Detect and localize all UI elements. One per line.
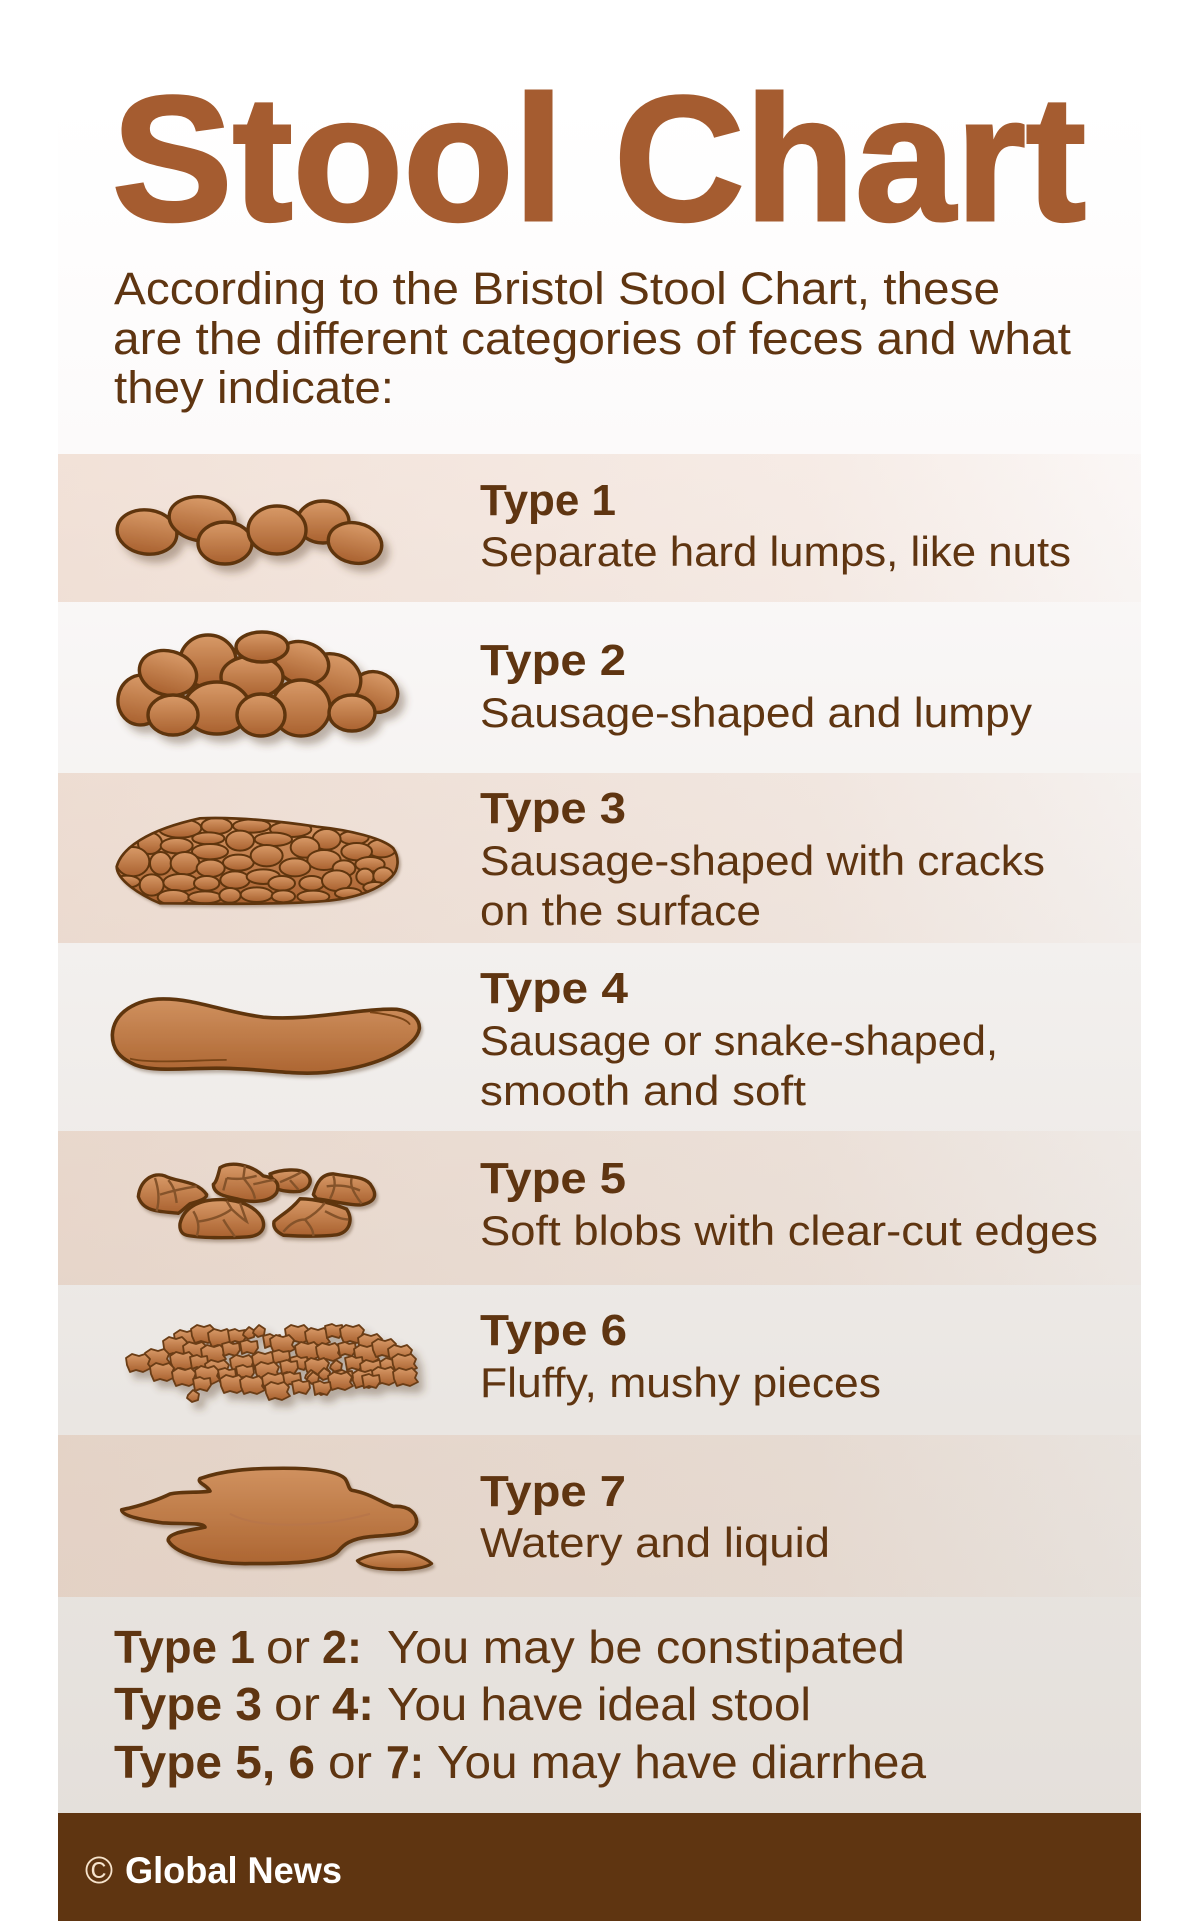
footer credit: Global News	[125, 1850, 342, 1891]
row band type 5	[58, 1131, 1141, 1285]
summary: type 5, 6 or 7: or	[328, 1736, 372, 1788]
text: type 6: Fluffy, mushy pieces	[480, 1359, 881, 1406]
icon: type 3 cracked sausage	[113, 818, 398, 905]
row band type 3	[58, 773, 1141, 943]
text: type 7	[480, 1467, 830, 1566]
text: type 4: Sausage or snake-shaped,	[480, 1017, 998, 1064]
summary: type 1 or 2: or	[266, 1621, 310, 1673]
text: type 4: smooth and soft	[480, 1067, 806, 1114]
icon: type 5 soft blobs	[138, 1164, 375, 1238]
text: type 7: Watery and liquid	[480, 1519, 830, 1566]
text: type 2: Sausage-shaped and lumpy	[480, 689, 1032, 736]
icon: type 6 mushy pieces	[126, 1324, 418, 1402]
text: type 3: on the surface	[480, 887, 761, 934]
text: type 5: Soft blobs with clear-cut edges	[480, 1207, 1098, 1254]
text: type 5	[480, 1154, 1098, 1254]
text: type 1	[480, 476, 1071, 575]
summary: type 5, 6 or 7: Type 5, 6	[114, 1736, 315, 1788]
summary: type 3 or 4: Type 3	[114, 1678, 262, 1730]
summary: type 1 or 2	[114, 1621, 905, 1673]
text: type 3: Sausage-shaped with cracks	[480, 837, 1045, 884]
title: Stool Chart	[112, 59, 1086, 258]
icon: type 4 smooth sausage	[112, 999, 419, 1073]
icon: type 7 liquid puddle	[122, 1468, 432, 1570]
text: type 3	[480, 784, 1045, 934]
summary: type 5, 6 or 7: 7:	[386, 1736, 424, 1788]
row band type 7	[58, 1435, 1141, 1597]
summary: type 5, 6 or 7	[114, 1736, 926, 1788]
text: type 6	[480, 1306, 881, 1406]
text: type 4	[480, 964, 998, 1114]
intro text: are the different categories of feces and what	[113, 313, 1072, 364]
intro text: According to the Bristol Stool Chart, these	[114, 263, 1000, 314]
text: type 6: Type 6	[480, 1306, 627, 1355]
icon: type 1 separate lumps	[114, 493, 386, 568]
summary: type 1 or 2: Type 1	[114, 1621, 255, 1673]
summary: type 1 or 2: 2:	[322, 1621, 362, 1673]
text: type 4: Type 4	[480, 964, 629, 1013]
text: type 5: Type 5	[480, 1154, 626, 1203]
summary: type 5, 6 or 7: You may have diarrhea	[437, 1736, 926, 1788]
summary: type 3 or 4: 4:	[332, 1678, 374, 1730]
intro text	[113, 263, 1072, 413]
footer band	[58, 1813, 1141, 1921]
summary: type 3 or 4: You have ideal stool	[387, 1678, 811, 1730]
row band type 1	[58, 454, 1141, 602]
text: type 1: Separate hard lumps, like nuts	[480, 528, 1071, 575]
summary: type 3 or 4	[114, 1678, 811, 1730]
text: type 2: Type 2	[480, 636, 626, 685]
text: type 2	[480, 636, 1032, 736]
summary: type 3 or 4: or	[274, 1678, 320, 1730]
intro text: they indicate:	[114, 362, 394, 413]
text: type 7: Type 7	[480, 1467, 626, 1516]
icon: type 2 lumpy sausage	[114, 632, 403, 736]
footer credit: ©	[85, 1850, 113, 1892]
text: type 1: Type 1	[480, 476, 616, 525]
text: type 3: Type 3	[480, 784, 626, 833]
summary: type 1 or 2: You may be constipated	[387, 1621, 905, 1673]
